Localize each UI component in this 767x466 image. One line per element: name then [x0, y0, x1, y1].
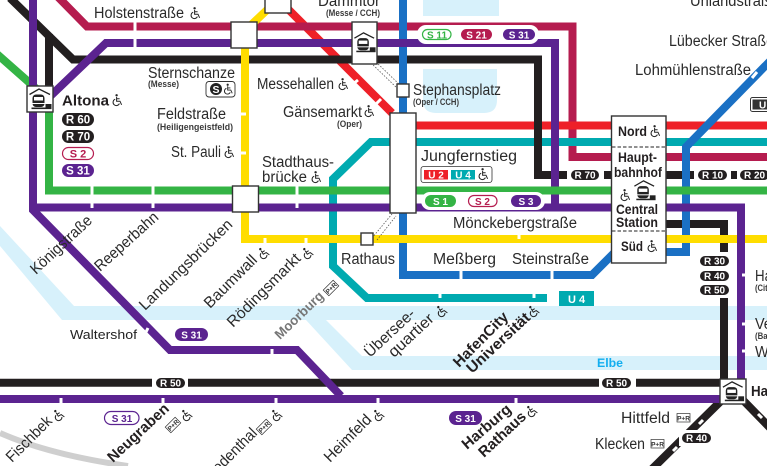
line pills: S1 S2 S3: S 3 [518, 197, 534, 208]
purple S31 upper line [40, 43, 555, 207]
station box: Schlump [265, 0, 291, 13]
label: Moorburg: P+R [325, 281, 339, 296]
pill R70 [567, 168, 604, 182]
label: Landungsbrücken: Landungsbrücken [136, 216, 236, 314]
label: Dammtor: (Messe / CCH) [326, 8, 380, 18]
green line [0, 54, 767, 190]
U-Bahn symbol [750, 98, 767, 112]
yellow U3 line [245, 9, 767, 239]
station: Dammtor [352, 22, 377, 64]
label: Harburg Rathaus [458, 401, 538, 461]
line pills north: S11 S21 S31: S 11 [427, 30, 447, 41]
label: Veddel [755, 316, 767, 341]
label: Altona with lines: Altona [62, 92, 110, 110]
label: Altona with lines: R 70 [66, 132, 90, 144]
blue U3 line [403, 0, 767, 275]
label: Waltershof: Waltershof [70, 327, 137, 342]
label: Stephansplatz: (Oper / CCH) [413, 97, 459, 107]
Central Station box [612, 116, 666, 263]
label: Lohmühlenstraße: Lohmühlenstraße [635, 62, 751, 79]
label: Elbe: Elbe [597, 356, 623, 370]
station box: Jungfernstieg [390, 113, 416, 213]
gray regional curve [0, 433, 128, 466]
label: Sternschanze [148, 65, 235, 97]
label: HafenCity Universität: Universität [463, 309, 534, 377]
label: Neugraben: P+R [167, 418, 181, 433]
label: Überseequartier: quartier [385, 310, 438, 361]
label: Jungfernstieg [421, 148, 517, 182]
label: Mönckebergstraße: Mönckebergstraße [453, 215, 577, 232]
Central Station box: Süd [621, 238, 643, 254]
label: Rödingsmarkt: Rödingsmarkt [224, 250, 305, 331]
red line horizontal [400, 122, 767, 130]
pill R40: R 40 [686, 434, 707, 445]
pills R10 R20 [694, 168, 767, 182]
label: Stadthausbrücke: brücke [262, 169, 307, 186]
pills R30 R40 R50: R 30 [704, 257, 725, 268]
label: Jungfernstieg: U 4 [455, 170, 471, 181]
label: Sternschanze: (Messe) [148, 79, 179, 89]
station box: Stephansplatz [397, 84, 409, 97]
line pills: S1 S2 S3: S 2 [475, 197, 490, 208]
label: Altona with lines: R 60 [66, 114, 90, 126]
pill R50 west [152, 377, 188, 390]
label: Holstenstraße: Holstenstraße [94, 5, 184, 22]
Central Station box: Haupt- [618, 149, 657, 165]
label: Neugraben: Neugraben [104, 400, 173, 466]
label: Hittfeld [621, 410, 690, 427]
label: Klecken: Klecken [595, 436, 645, 453]
station: Altona [27, 86, 53, 112]
label: Klecken: P+R [651, 442, 664, 448]
label: Stephansplatz: Stephansplatz [413, 82, 501, 99]
black regional line top [10, 0, 767, 175]
Central Station box: Station [616, 214, 658, 230]
pill S31 Waltershof [175, 328, 208, 341]
red line diagonal [278, 0, 392, 113]
label: Meßberg: Meßberg [433, 251, 496, 268]
U-Bahn symbol: U [759, 100, 766, 112]
teal U4 line [333, 142, 767, 298]
label: Königstraße: Königstraße [27, 212, 96, 278]
Central Station box: Central [616, 201, 658, 217]
label: Gänsemarkt: Gänsemarkt [283, 104, 363, 121]
line pills north: S11 S21 S31: S 31 [509, 30, 530, 41]
black lines south of Harburg [651, 395, 767, 466]
label: Neuwiedenthal: P+R [258, 420, 272, 435]
magenta S-Bahn line [58, 0, 767, 157]
line pills north: S11 S21 S31: S 21 [466, 30, 487, 41]
label: Moorburg: Moorburg [272, 288, 327, 342]
label: Überseequartier: Übersee- [360, 305, 419, 361]
line pills: S1 S2 S3 [421, 192, 545, 210]
pill R40 [679, 430, 714, 446]
label: Harburg Rathaus: Harburg [458, 401, 515, 453]
label: Jungfernstieg: U 2 [428, 170, 444, 181]
label: Sternschanze: S [212, 84, 220, 96]
dotted station links [371, 62, 400, 240]
station box: Stadthausbrücke [232, 186, 258, 212]
station box: Sternschanze [231, 22, 257, 48]
pill R50 west: R 50 [160, 379, 181, 390]
label: Überseequartier [360, 304, 448, 361]
label: Steinstraße: Steinstraße [512, 251, 589, 268]
label: Jungfernstieg: Jungfernstieg [421, 148, 517, 165]
pill R50 east: R 50 [606, 379, 627, 390]
label: Stadthausbrücke [262, 154, 334, 186]
pills R10 R20: R 10 [702, 171, 723, 182]
label: Heimfeld: Heimfeld [321, 411, 375, 466]
pill R70: R 70 [574, 171, 596, 182]
label: Hittfeld: P+R [677, 416, 690, 422]
black branch to Altona [45, 34, 53, 90]
Central Station box: Nord [618, 123, 647, 139]
U4 label: U 4 [568, 294, 586, 306]
label: Stephansplatz [413, 82, 501, 107]
label: Harburg Rathaus: Rathaus [475, 408, 530, 461]
black R50 line [0, 379, 725, 387]
label: Baumwall: Baumwall [201, 252, 261, 312]
label: Gänsemarkt: (Oper) [337, 119, 362, 129]
pills R10 R20: R 20 [744, 171, 765, 182]
label: St. Pauli: St. Pauli [171, 144, 221, 161]
label: Altona with lines: S 2 [70, 148, 86, 160]
pills R30 R40 R50: R 50 [704, 286, 725, 297]
line pills: S1 S2 S3: S 1 [433, 197, 448, 208]
pill S31 outline Neugraben [104, 412, 139, 425]
pill S31 Harburg: S 31 [455, 414, 476, 425]
label: Hammerbrook [755, 268, 767, 293]
label: Feldstraße [157, 106, 233, 132]
label: Altona with lines [62, 92, 122, 178]
label: Rathaus: Rathaus [341, 251, 395, 268]
label: HafenCity Universität [450, 304, 540, 377]
pills R30 R40 R50: R 40 [704, 272, 725, 283]
label: Neuwiedenthal [181, 408, 283, 466]
water: Elbe and Alster [0, 0, 767, 370]
line pills north: S11 S21 S31 [417, 25, 539, 44]
label: Gänsemarkt [283, 104, 374, 129]
Central Station box: bahnhof [614, 164, 662, 180]
label: HafenCity Universität: HafenCity [450, 308, 513, 371]
label: Sternschanze: Sternschanze [148, 65, 235, 82]
label: Reeperbahn: Reeperbahn [91, 209, 162, 275]
label: Feldstraße: (Heiligengeistfeld) [157, 122, 233, 132]
pill S31 Harburg [449, 411, 482, 425]
station: Harburg [720, 379, 746, 404]
label: Fischbek: Fischbek [3, 413, 56, 466]
pill S31 Waltershof: S 31 [181, 330, 202, 341]
pill S31 outline Neugraben: S 31 [112, 414, 133, 425]
label: Messehallen: Messehallen [257, 76, 334, 93]
black line from central station [640, 224, 724, 385]
station box: Rathaus [361, 233, 373, 245]
pills R30 R40 R50 [697, 252, 732, 298]
label: Feldstraße: Feldstraße [157, 106, 226, 123]
label: Altona with lines: S 31 [66, 166, 90, 178]
pill R50 east [599, 377, 636, 390]
label: Dammtor [318, 0, 380, 18]
label: Stadthausbrücke: Stadthaus- [262, 154, 334, 171]
label: Hittfeld: Hittfeld [621, 410, 670, 427]
U4 label [559, 291, 594, 306]
